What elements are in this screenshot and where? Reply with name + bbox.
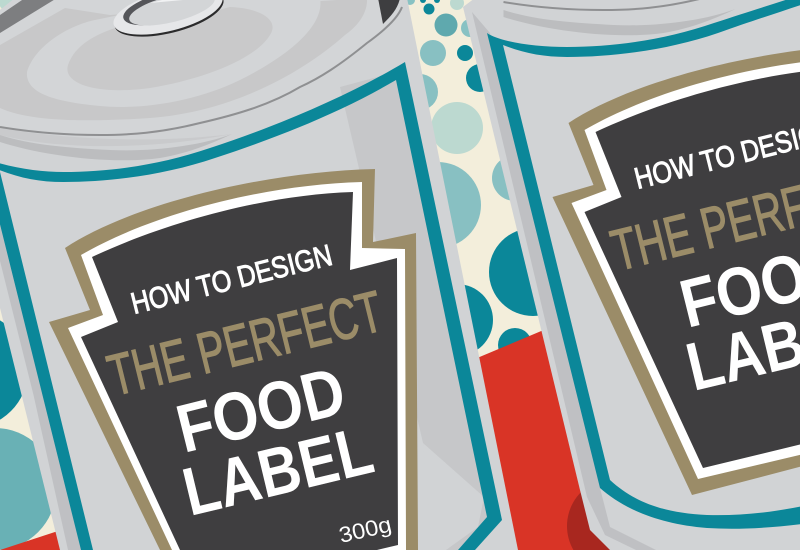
left label text	[102, 239, 394, 548]
right label shield	[552, 44, 800, 495]
left label white border	[68, 182, 406, 550]
left can shoulder shadow	[0, 134, 232, 160]
left label text: THE PERFECT	[102, 279, 389, 409]
left can shoulder light band	[0, 128, 232, 146]
left can lid	[0, 0, 402, 135]
left can grey edge strip	[0, 135, 81, 550]
left label shield	[49, 169, 418, 550]
left label text: HOW TO DESIGN	[128, 239, 336, 321]
right can	[463, 0, 800, 550]
left label tan border	[49, 169, 418, 550]
left can body shading	[340, 72, 487, 550]
right can teal label band	[487, 0, 800, 529]
left can body	[0, 0, 518, 550]
right can rim line	[504, 0, 704, 10]
left can	[0, 0, 518, 550]
left can teal label band	[0, 62, 502, 550]
dark red can shadow on background	[567, 478, 663, 550]
right can grey edge strip	[472, 12, 656, 550]
right label text	[605, 114, 800, 406]
right label white border	[572, 57, 800, 479]
left label text: 300g	[337, 512, 394, 548]
left label text: LABEL	[176, 412, 380, 531]
left label text: FOOD	[169, 353, 353, 468]
right label dark panel	[584, 67, 800, 468]
right can shoulder shadow	[504, 9, 736, 35]
right can body	[463, 0, 800, 550]
left can lower highlight	[423, 443, 484, 550]
right label tan border	[552, 44, 800, 495]
left label dark panel	[81, 192, 398, 550]
icon: pull tab	[109, 0, 228, 46]
